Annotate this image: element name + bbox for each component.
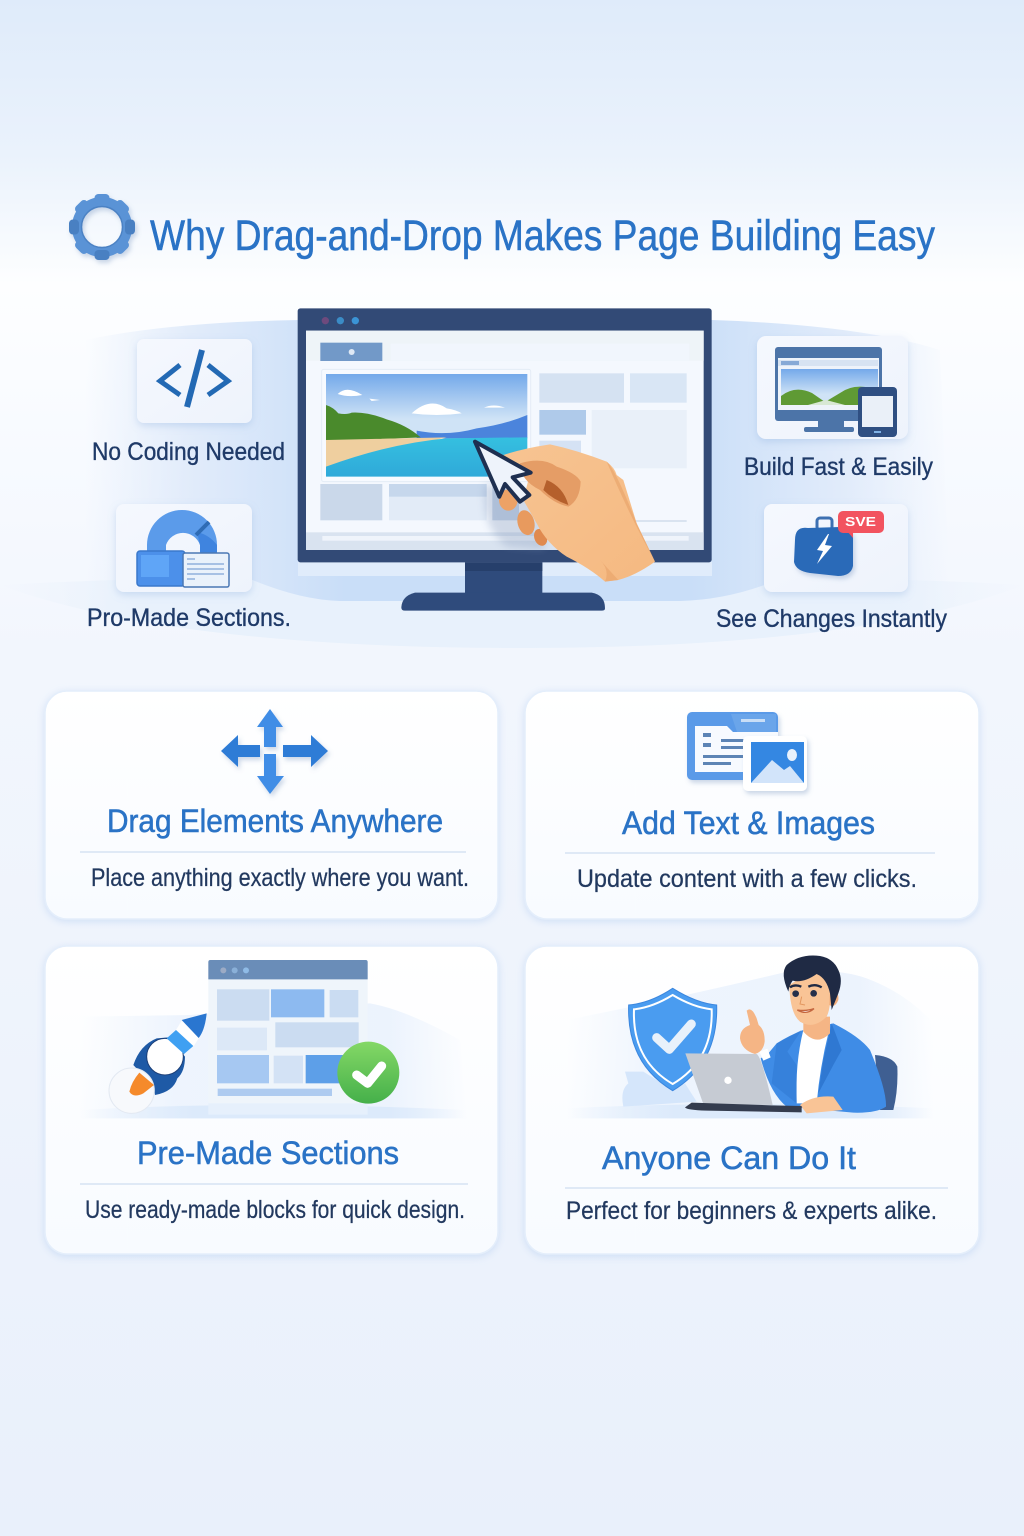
monitor stand [401,562,605,611]
card background [45,691,498,919]
card description: Perfect for beginners & experts alike. [566,1197,937,1225]
rocket [109,1013,207,1113]
icon: gear [69,194,135,260]
green check [337,1042,399,1104]
hero panel [0,308,1024,648]
illustration: rocket and layout window [80,960,467,1118]
feature: see changes instantly [716,504,947,633]
card description: Use ready-made blocks for quick design. [85,1196,465,1224]
feature: pro-made sections [87,504,291,632]
hero background swoosh [0,320,1024,648]
feature: build fast and easily [744,336,933,481]
layout window [208,960,368,1115]
person [740,956,886,1113]
label: Pro-Made Sections. [87,604,291,632]
card title: Anyone Can Do It [602,1140,856,1176]
card title: Add Text & Images [622,805,875,841]
backdrop [567,971,933,1118]
chair [875,1055,897,1110]
card: anyone can do it [525,946,979,1254]
label: No Coding Needed [92,438,285,466]
card: add text and images [525,691,979,919]
card: pre-made sections [45,946,498,1254]
card title: Pre-Made Sections [137,1135,399,1171]
dragged beach image [322,369,531,482]
card description: Update content with a few clicks. [577,865,917,893]
icon: code tile [137,339,252,423]
icon: sections tile [116,504,252,592]
illustration: person with laptop and shield [567,956,933,1118]
icon: save badge tile [764,504,908,592]
laptop [685,1053,802,1112]
label: Build Fast & Easily [744,453,933,481]
hand and cursor [475,442,655,582]
card: drag elements anywhere [45,691,498,919]
monitor frame [298,308,712,562]
icon: save badge tile: SVE [845,514,876,529]
icon: document and picture [687,712,807,791]
shield [622,988,717,1107]
card title: Drag Elements Anywhere [107,803,443,839]
screen page layout [306,331,704,550]
card background [45,946,498,1254]
card description: Place anything exactly where you want. [91,864,469,892]
header [69,194,935,260]
backdrop [80,1003,467,1118]
card background [525,691,979,919]
icon: devices tile [757,336,908,439]
monitor illustration [298,308,712,611]
icon: four-way arrows [221,709,328,794]
label: See Changes Instantly [716,605,947,633]
card background [525,946,979,1254]
feature: no coding needed [92,339,285,466]
